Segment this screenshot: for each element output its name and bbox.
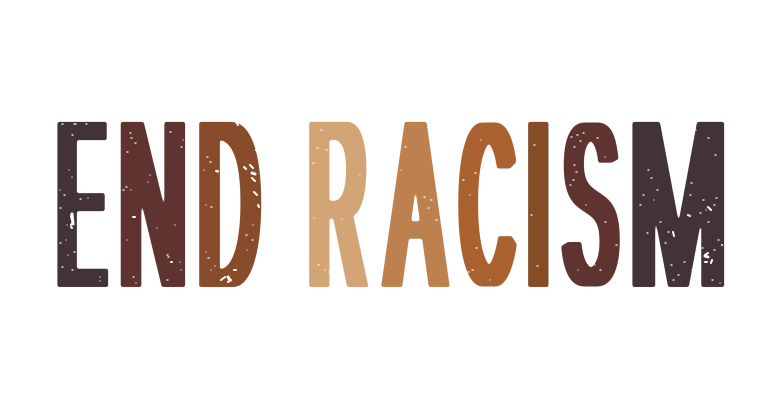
letter E: E — [58, 71, 105, 339]
letter D: D — [199, 70, 259, 339]
letter C: C — [461, 76, 513, 334]
letter A: A — [387, 71, 443, 339]
letter S: S — [564, 74, 617, 334]
letter R: R — [309, 69, 366, 338]
letter N: N — [120, 69, 186, 339]
letter I: I — [527, 69, 549, 338]
word: RACISM — [309, 69, 727, 339]
word: END — [58, 69, 259, 339]
letter M: M — [629, 71, 727, 339]
distress specks — [60, 122, 722, 283]
